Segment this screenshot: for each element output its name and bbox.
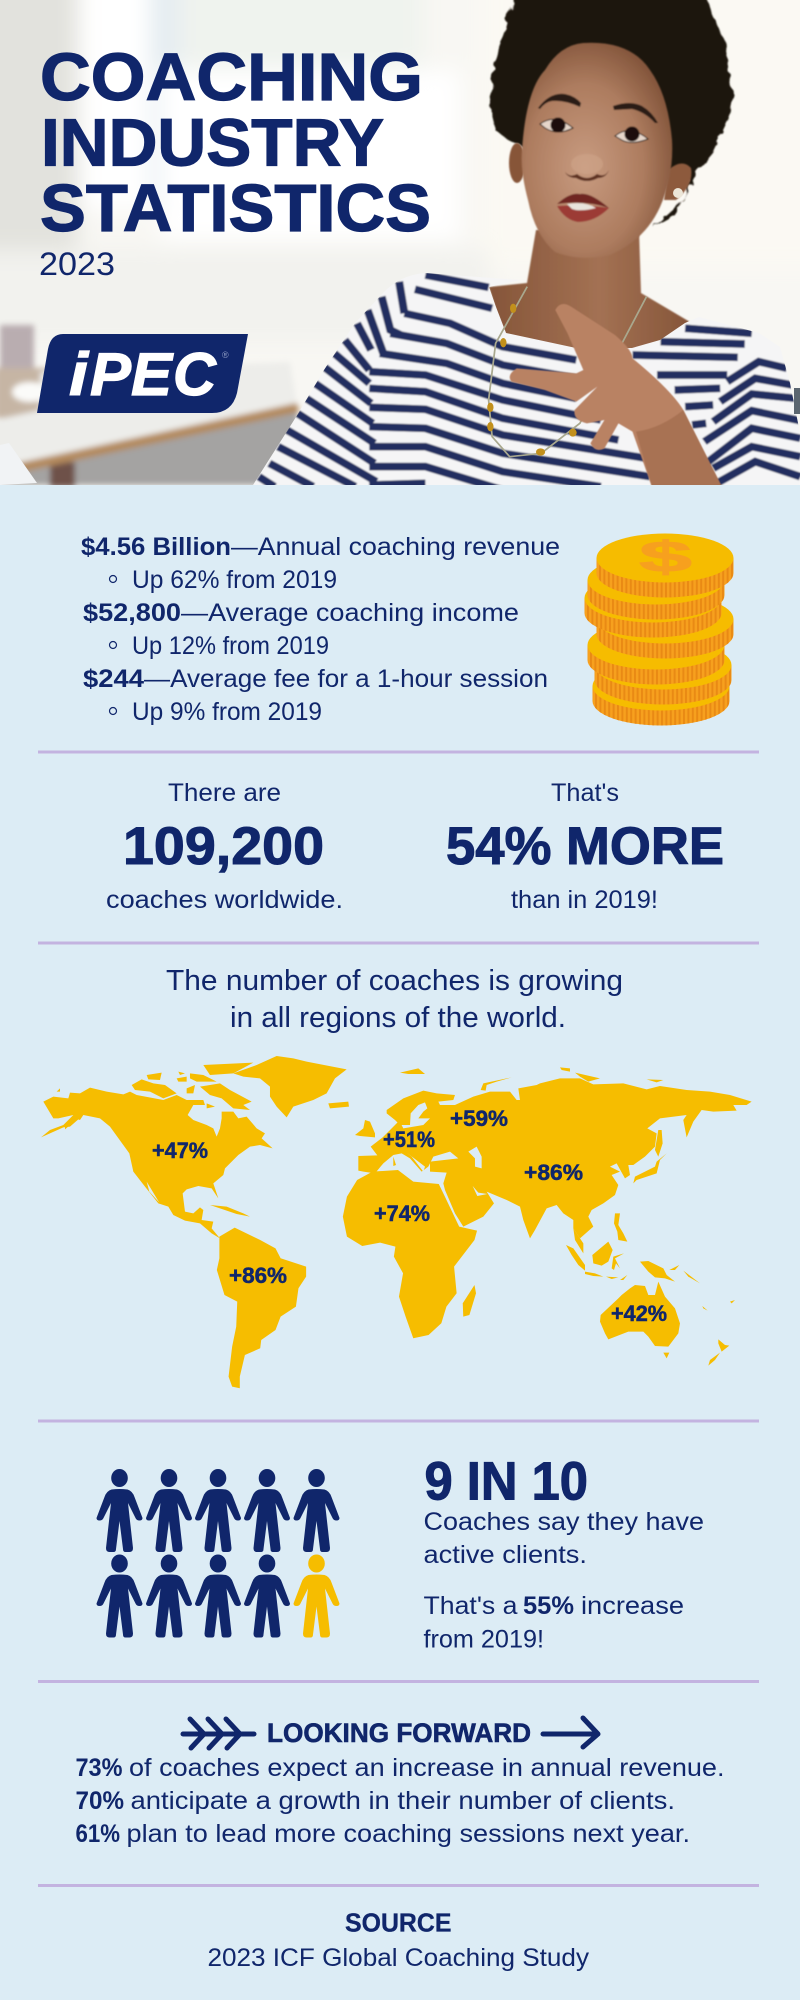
map labels: +47% [152,1138,208,1163]
stat: average income: —Average coaching income [181,599,519,627]
title [40,40,431,246]
source: SOURCE [345,1908,452,1938]
map labels: +74% [374,1201,430,1226]
icon: coin stack [584,533,734,726]
stat: average income [83,599,519,660]
hero photo: woman coaching [0,0,800,490]
map labels: +42% [611,1301,667,1326]
world map [41,1056,752,1388]
panel: 54% more: 54% MORE [446,817,724,876]
map: North America and Greenland [41,1056,349,1238]
logo: iPEC [37,334,248,413]
icon: ten people, nine navy one yellow [96,1469,340,1638]
stat: session fee: $244 [83,665,144,693]
text block: forward stats: of coaches expect an increase in annual revenue. [129,1754,724,1782]
map labels: +51% [383,1127,435,1152]
heading: regions: in all regions of the world. [230,1002,566,1034]
panel: 9 in 10: increase [581,1592,684,1620]
panel: 9 in 10: Coaches say they have [424,1508,704,1536]
stat: annual revenue: Up 62% from 2019 [132,566,337,594]
logo: iPEC: i [69,341,90,408]
text block: forward stats: anticipate a growth in their number of clients. [130,1787,675,1815]
text block: forward stats: 61% [76,1820,120,1848]
panel: revenue statistics [81,533,560,726]
year: 2023 [39,246,115,282]
hair [490,0,733,227]
map: Eurasia [355,1067,752,1238]
necklace [487,287,647,457]
ears [509,143,525,183]
logo: iPEC: C [173,341,218,408]
title: STATISTICS [40,171,431,246]
stat: annual revenue: $4.56 Billion [81,533,231,561]
panel: 9 in 10 [424,1452,704,1654]
map labels: +86% [524,1160,583,1185]
heading: regions: The number of coaches is growing [166,965,623,997]
panel: 9 in 10: 9 IN 10 [424,1452,588,1512]
map labels: +59% [450,1106,508,1131]
text block: forward stats: plan to lead more coaching sessions next year. [126,1820,690,1848]
source [208,1908,590,1972]
panel: coaches worldwide: There are [168,779,281,807]
hand [510,304,722,487]
panel: 54% more [446,779,724,914]
logo: iPEC: P [90,341,132,408]
panel: 54% more: than in 2019! [511,886,658,914]
map labels: +86% [229,1263,287,1288]
text block: forward stats: 73% [76,1754,122,1782]
panel: 9 in 10: active clients. [424,1541,587,1569]
stat: session fee [83,665,548,726]
arrow: triple chevron [183,1719,254,1748]
stat: annual revenue [81,533,560,594]
stat: average income: Up 12% from 2019 [132,632,329,660]
title: INDUSTRY [41,106,384,180]
panel: 9 in 10: 55% [523,1592,574,1620]
woman figure [250,0,800,490]
arrow: right [543,1718,598,1747]
panel: coaches worldwide: 109,200 [123,817,324,876]
panel: 54% more: That's [551,779,619,807]
heading: looking forward: LOOKING FORWARD [267,1718,531,1748]
stat: session fee: Up 9% from 2019 [132,698,322,726]
striped shirt [250,270,800,490]
panel: coaches worldwide: coaches worldwide. [106,886,343,914]
panel: 9 in 10: That's a [424,1592,518,1620]
logo: iPEC: ® [222,350,229,360]
text block: forward stats: 70% [76,1787,124,1815]
title: COACHING [40,40,423,115]
stat: session fee: —Average fee for a 1-hour session [144,665,548,693]
face [522,43,672,258]
logo: iPEC: E [131,341,174,408]
panel: 9 in 10: from 2019! [424,1626,544,1654]
map: Southeast Asia and Oceania [566,1213,735,1366]
stat: annual revenue: —Annual coaching revenue [231,533,560,561]
map labels [152,1106,667,1326]
stat: average income: $52,800 [83,599,181,627]
heading: regions [166,965,623,1034]
source: 2023 ICF Global Coaching Study [208,1944,590,1972]
map: Africa and South America [217,1170,477,1388]
panel: coaches worldwide [106,779,343,914]
text block: forward stats [76,1754,724,1848]
icon: coin stack: $ [639,533,692,582]
